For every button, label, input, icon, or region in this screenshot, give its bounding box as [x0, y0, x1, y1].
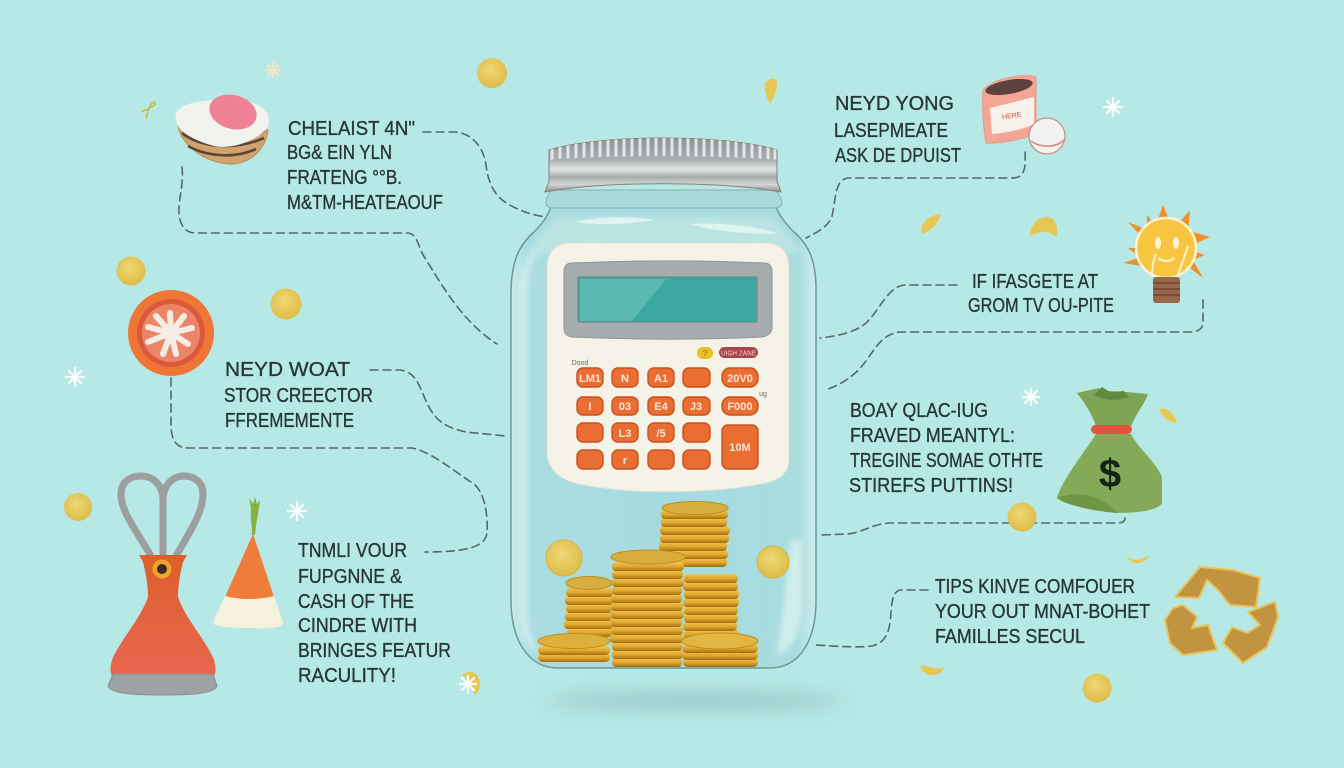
- text block: lower-middle right tip: TREGINE SOMAE OTHTE: [850, 450, 1043, 472]
- cake filling stripes: [182, 133, 264, 155]
- text block: middle-left tip: FFREMEMENTE: [225, 410, 354, 432]
- text block: bottom-left tip: CASH OF THE: [298, 591, 414, 613]
- text block: bottom-right tip: FAMILLES SECUL: [935, 626, 1085, 648]
- text block: top-left tip: FRATENG °°B.: [287, 167, 402, 189]
- calculator keys: F000: [727, 401, 753, 413]
- center stack: [610, 550, 685, 667]
- text block: middle-left tip: NEYD WOAT: [225, 359, 350, 381]
- calculator keys: LM1: [579, 373, 601, 385]
- calculator keys: 20V0: [727, 373, 753, 385]
- calculator keys: E4: [654, 401, 669, 413]
- can label: HERE: [1002, 112, 1022, 121]
- carrot cream base: [213, 596, 283, 628]
- white ball: [1029, 118, 1065, 154]
- calculator keys: r: [623, 455, 628, 467]
- text block: top-left tip: BG& EIN YLN: [287, 142, 392, 164]
- can body: [983, 75, 1036, 143]
- coins floating in jar: [546, 540, 789, 578]
- display screen: [578, 277, 757, 322]
- carrot leaves: [249, 497, 260, 535]
- carrot orange top: [225, 534, 274, 599]
- handles: [121, 476, 203, 556]
- jar side highlights: [519, 252, 540, 655]
- text block: top-right tip: ASK DE DPUIST: [835, 145, 961, 167]
- calculator keys: I: [588, 401, 592, 413]
- bottom-right stack: [682, 633, 758, 667]
- display glare: [580, 279, 666, 321]
- bell grey base: [108, 674, 217, 695]
- bottom-left stack: [538, 634, 610, 662]
- text block: bottom-left tip: FUPGNNE &: [298, 566, 403, 588]
- calculator keys: /5: [656, 428, 666, 440]
- connector: top-right middle text to jar: [820, 285, 957, 338]
- text block: upper-middle right tip: GROM TV OU-PITE: [968, 295, 1114, 317]
- bag body: [1057, 434, 1162, 513]
- text block: bottom-left tip: BRINGES FEATUR: [298, 640, 451, 662]
- bulb face: [1152, 238, 1188, 277]
- bell body: [110, 555, 216, 676]
- tall back stack: [659, 502, 730, 567]
- bag shade: [1057, 494, 1118, 513]
- connector: bulb icon to jar: [825, 300, 1203, 390]
- icon: carrot cone: [213, 497, 283, 628]
- lid ridge marks: [550, 138, 776, 160]
- icon: orange badge: [128, 290, 214, 376]
- can dark top: [984, 76, 1034, 98]
- bulb screw base: [1153, 277, 1180, 303]
- text block: top-right tip: [834, 93, 961, 167]
- text block: bottom-left tip: [298, 540, 451, 687]
- top arrow: [1175, 567, 1260, 607]
- jar white streaks: [575, 217, 778, 234]
- calculator keys: 03: [619, 401, 631, 413]
- left arrow: [1165, 605, 1217, 655]
- text block: bottom-left tip: CINDRE WITH: [298, 615, 417, 637]
- red indicator pill: UIGH ZANE: [721, 348, 756, 358]
- right stack: [683, 574, 739, 639]
- jar ground shadow: [545, 693, 845, 709]
- icon: smiling sun bulb: [1123, 205, 1210, 303]
- text block: top-left tip: M&TM-HEATEAOUF: [287, 192, 443, 214]
- text block: lower-middle right tip: FRAVED MEANTYL:: [850, 425, 1015, 447]
- text block: top-left tip: [287, 118, 443, 214]
- connector: cake icon to jar: [179, 167, 497, 344]
- text block: lower-middle right tip: BOAY QLAC-IUG: [850, 400, 988, 422]
- text block: top-right tip: LASEPMEATE: [834, 120, 948, 142]
- text block: bottom-right tip: YOUR OUT MNAT-BOHET: [935, 601, 1150, 623]
- text block: top-right tip: NEYD YONG: [835, 93, 954, 115]
- display bezel: [564, 261, 772, 339]
- calculator keys: 10M: [729, 442, 751, 454]
- text block: lower-middle right tip: [849, 400, 1043, 497]
- bulb globe: [1136, 218, 1196, 278]
- text block: bottom-right tip: TIPS KINVE COMFOUER: [935, 576, 1135, 598]
- cake pink topping: [205, 89, 261, 135]
- text block: lower-middle right tip: STIREFS PUTTINS!: [849, 475, 1013, 497]
- jar lid: [545, 134, 781, 192]
- connector: top-left text to jar: [423, 132, 546, 217]
- text block: top-left tip: CHELAIST 4N": [288, 118, 415, 140]
- calculator keys: J3: [690, 401, 702, 413]
- decorative white flowers: [66, 63, 1122, 693]
- connector: money bag to jar: [820, 518, 1125, 535]
- bag red band: [1091, 425, 1132, 434]
- text block: bottom-left tip: RACULITY!: [298, 665, 396, 687]
- calculator body: [547, 243, 789, 492]
- bag inner: [1094, 387, 1129, 400]
- left stack: [564, 576, 613, 637]
- decorative gold squiggle: [142, 102, 155, 119]
- yellow indicator pill: [697, 347, 713, 359]
- small side mark: ug: [759, 391, 767, 398]
- icon: grey handled orange bell: [108, 476, 217, 695]
- text block: bottom-left tip: TNMLI VOUR: [298, 540, 407, 562]
- icon: gold recycling arrows: [1165, 567, 1278, 663]
- jar shoulder highlights: [528, 216, 800, 258]
- decorative gold flakes: [462, 78, 1177, 695]
- text block: middle-left tip: STOR CREECTOR: [224, 385, 373, 407]
- connector: can icon to jar: [806, 152, 1025, 238]
- sun rays: [1123, 205, 1210, 278]
- jar neck: [546, 190, 782, 208]
- coin stacks: [538, 502, 758, 667]
- text block: bottom-right tip: [935, 576, 1150, 648]
- calculator keys: A1: [654, 373, 668, 385]
- connector: orange badge to bottom-left text: [171, 378, 487, 552]
- calculator keys: [577, 368, 758, 469]
- jar base highlight: [776, 540, 802, 655]
- right arrow: [1223, 602, 1278, 663]
- bell eye: [152, 560, 172, 578]
- text block: upper-middle right tip: IF IFASGETE AT: [972, 271, 1098, 293]
- connector: middle-left text to jar: [370, 370, 506, 436]
- calculator keys: N: [621, 373, 629, 385]
- badge white star: [148, 313, 192, 354]
- dollar sign: $: [1099, 452, 1121, 496]
- jar: [511, 190, 816, 668]
- yellow indicator pill: ?: [703, 349, 708, 358]
- bag top frill: [1077, 388, 1148, 427]
- lid band: [545, 138, 781, 192]
- connector: recycling text to jar: [815, 590, 928, 647]
- calculator: [547, 243, 789, 492]
- decorative coins: [64, 58, 1112, 702]
- jar glass body: [511, 206, 816, 668]
- text block: upper-middle right tip: [968, 271, 1114, 317]
- calculator keys: L3: [619, 428, 631, 440]
- cake white frosting: [176, 100, 269, 147]
- small key label: Dood: [572, 360, 588, 367]
- icon: layered cake: [176, 89, 269, 164]
- icon: green money bag: [1057, 387, 1162, 513]
- icon: coffee can and ball: [983, 75, 1065, 154]
- cake biscuit base: [178, 125, 268, 164]
- infographic canvas: [64, 58, 1279, 716]
- text block: middle-left tip: [224, 359, 373, 432]
